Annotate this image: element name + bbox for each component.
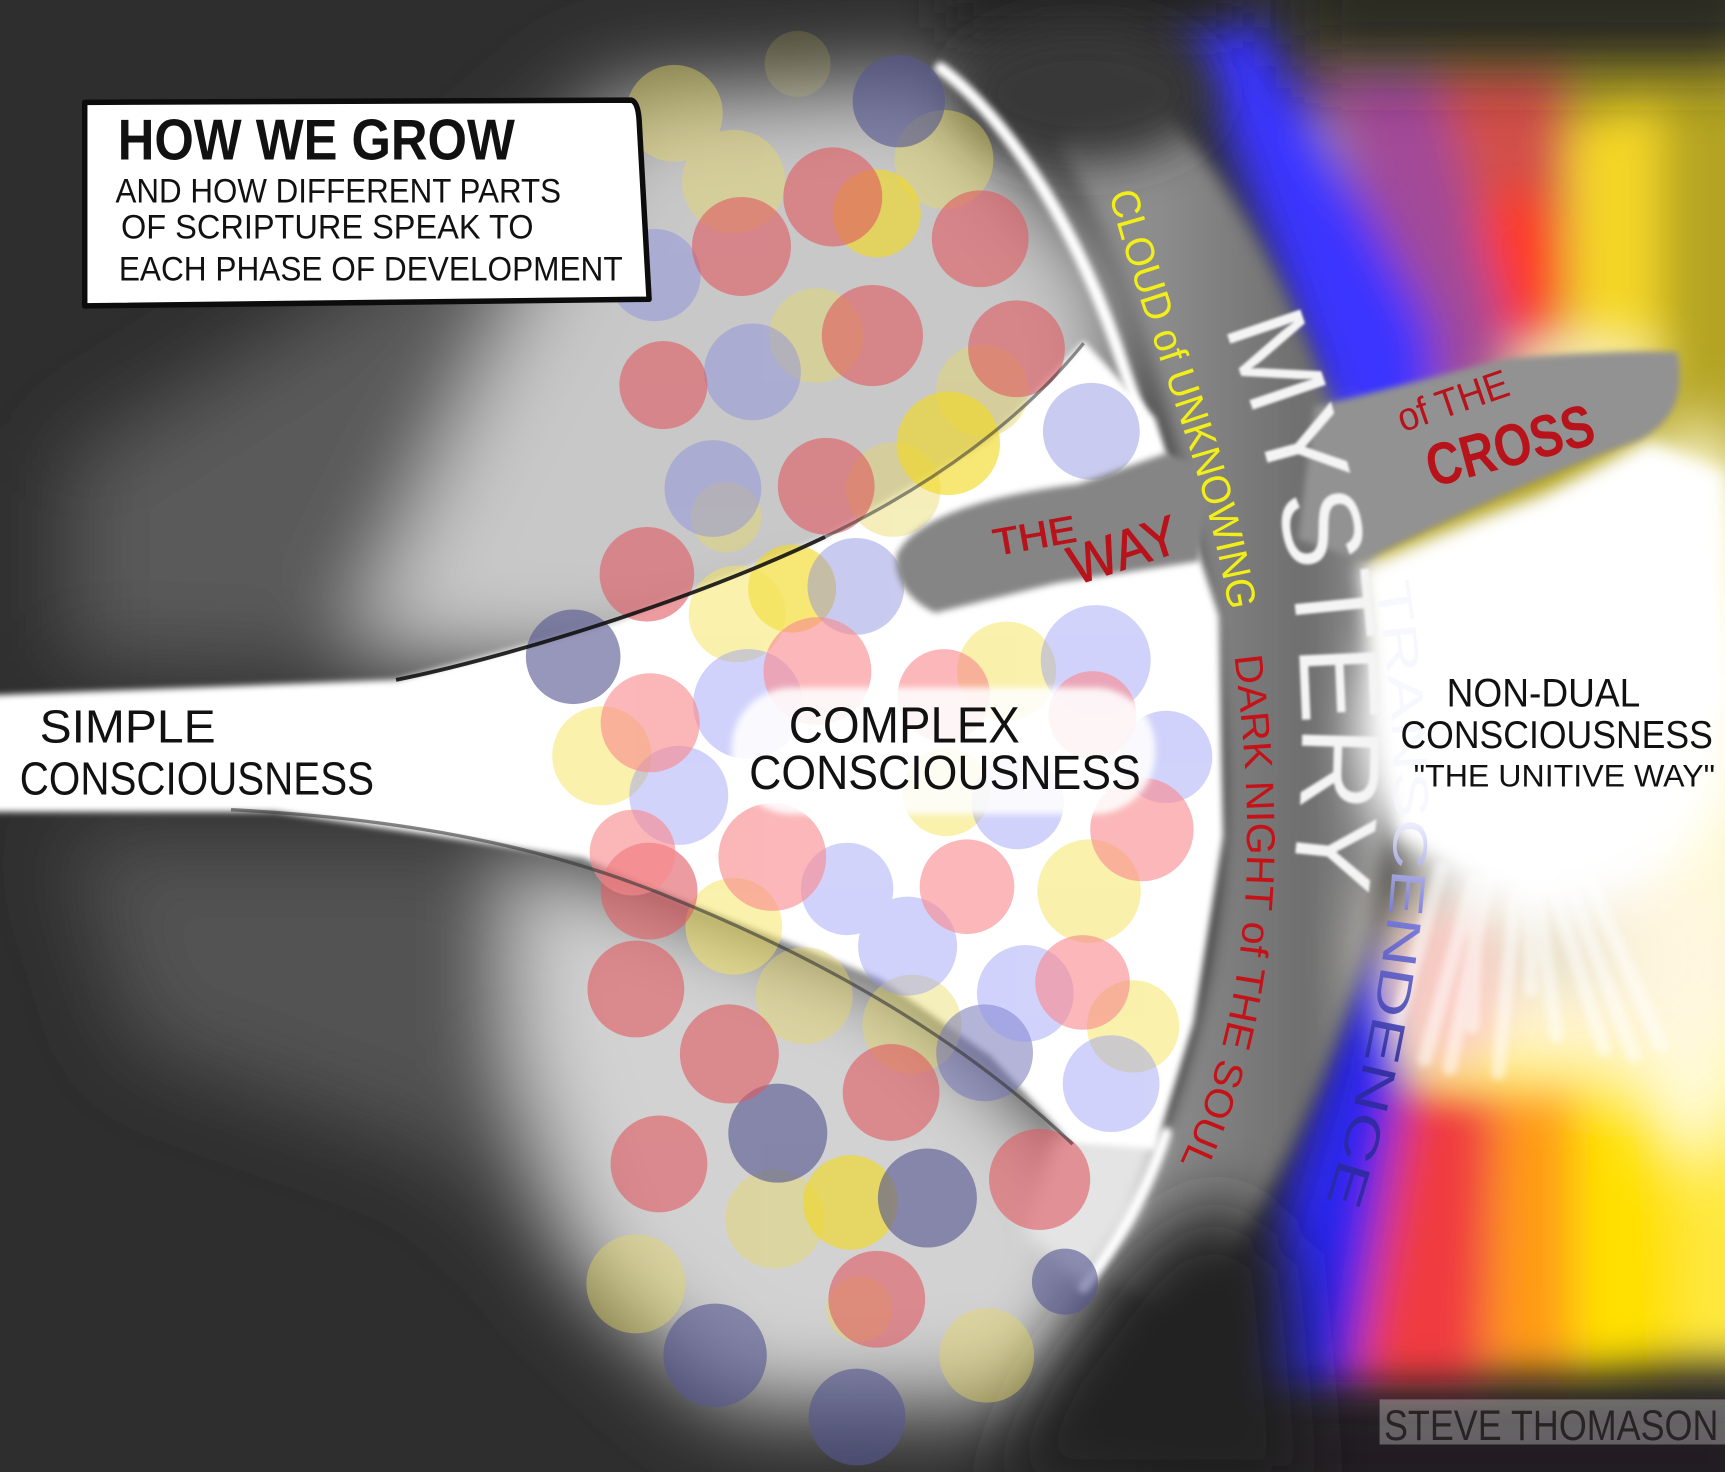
right side pale glow	[1595, 418, 1725, 1166]
label: simple consciousness: CONSCIOUSNESS	[20, 752, 374, 804]
funnel outline lower	[231, 810, 1073, 1144]
white funnel of growth	[0, 341, 1223, 1150]
title box	[85, 100, 649, 306]
mid lilac dot	[936, 1004, 1033, 1101]
label: the way: WAY	[1060, 503, 1186, 597]
label: complex consciousness: CONSCIOUSNESS	[749, 746, 1141, 800]
sun rays	[1397, 869, 1661, 1073]
label: the way	[990, 503, 1186, 597]
faint top dot	[765, 31, 831, 97]
label: of the cross: of THE	[1391, 362, 1515, 441]
rainbow fade to dark along the bottom	[1144, 1403, 1725, 1472]
title heading: HOW WE GROW	[118, 109, 515, 173]
funnel outline upper	[396, 537, 825, 680]
sun lower haze	[1375, 836, 1725, 1078]
sun upper mass	[1359, 440, 1725, 891]
label: of the cross	[1391, 362, 1602, 500]
title subtitle: OF SCRIPTURE SPEAK TO	[121, 209, 534, 247]
rainbow glow: bottom	[1221, 935, 1725, 1408]
cross beam right: of the cross	[1298, 351, 1680, 561]
label: non-dual consciousness	[1400, 671, 1715, 794]
label: the way: THE	[990, 508, 1079, 563]
word: cloud of unknowing: CLOUD of UNKNOWING	[1112, 191, 1255, 607]
rainbow fade to dark along the top	[1298, 0, 1725, 66]
label: complex consciousness	[749, 697, 1141, 800]
sun lower haze pink side	[1392, 902, 1502, 1078]
light wedge at foot of funnel	[1023, 1133, 1166, 1287]
label: non-dual consciousness: "THE UNITIVE WAY"	[1414, 758, 1715, 794]
grey arc band	[1056, 66, 1391, 1320]
title subtitle: AND HOW DIFFERENT PARTS	[116, 172, 561, 210]
sun core	[1359, 534, 1725, 919]
label: complex consciousness: COMPLEX	[789, 697, 1020, 754]
word: dark night of the soul: DARK NIGHT of THE SOUL	[1180, 656, 1275, 1163]
white arc upper edge	[941, 68, 1172, 517]
top centre dark	[946, 0, 1243, 28]
label: of the cross: CROSS	[1418, 391, 1602, 500]
label: simple consciousness	[20, 701, 374, 804]
rainbow glow: top	[1177, 0, 1725, 649]
white glow behind complex consciousness	[732, 688, 1155, 814]
pale glow above cross beam	[1502, 330, 1667, 385]
sun: non-dual light	[1359, 440, 1725, 1078]
white arc lower edge	[1084, 1133, 1166, 1287]
word: mystery: MYSTERY	[1226, 308, 1378, 894]
dark shadow at foot of arc	[990, 1199, 1309, 1472]
title box frame	[85, 100, 649, 306]
title subtitle	[116, 172, 623, 289]
cross beam left: the way	[896, 453, 1210, 613]
label: simple consciousness: SIMPLE	[40, 701, 216, 753]
circles: developmental dots	[526, 31, 1212, 1465]
title subtitle: EACH PHASE OF DEVELOPMENT	[119, 251, 623, 289]
label: non-dual consciousness: NON-DUAL	[1447, 671, 1640, 715]
background: grey wash upper left	[66, 66, 1144, 682]
dark shadow at head of arc	[957, 25, 1210, 162]
funnel outline upper fading	[825, 343, 1084, 537]
background: grey wash lower left	[66, 836, 1133, 1419]
word: transcendence: TRANSCENDENCE	[1327, 794, 1428, 1207]
